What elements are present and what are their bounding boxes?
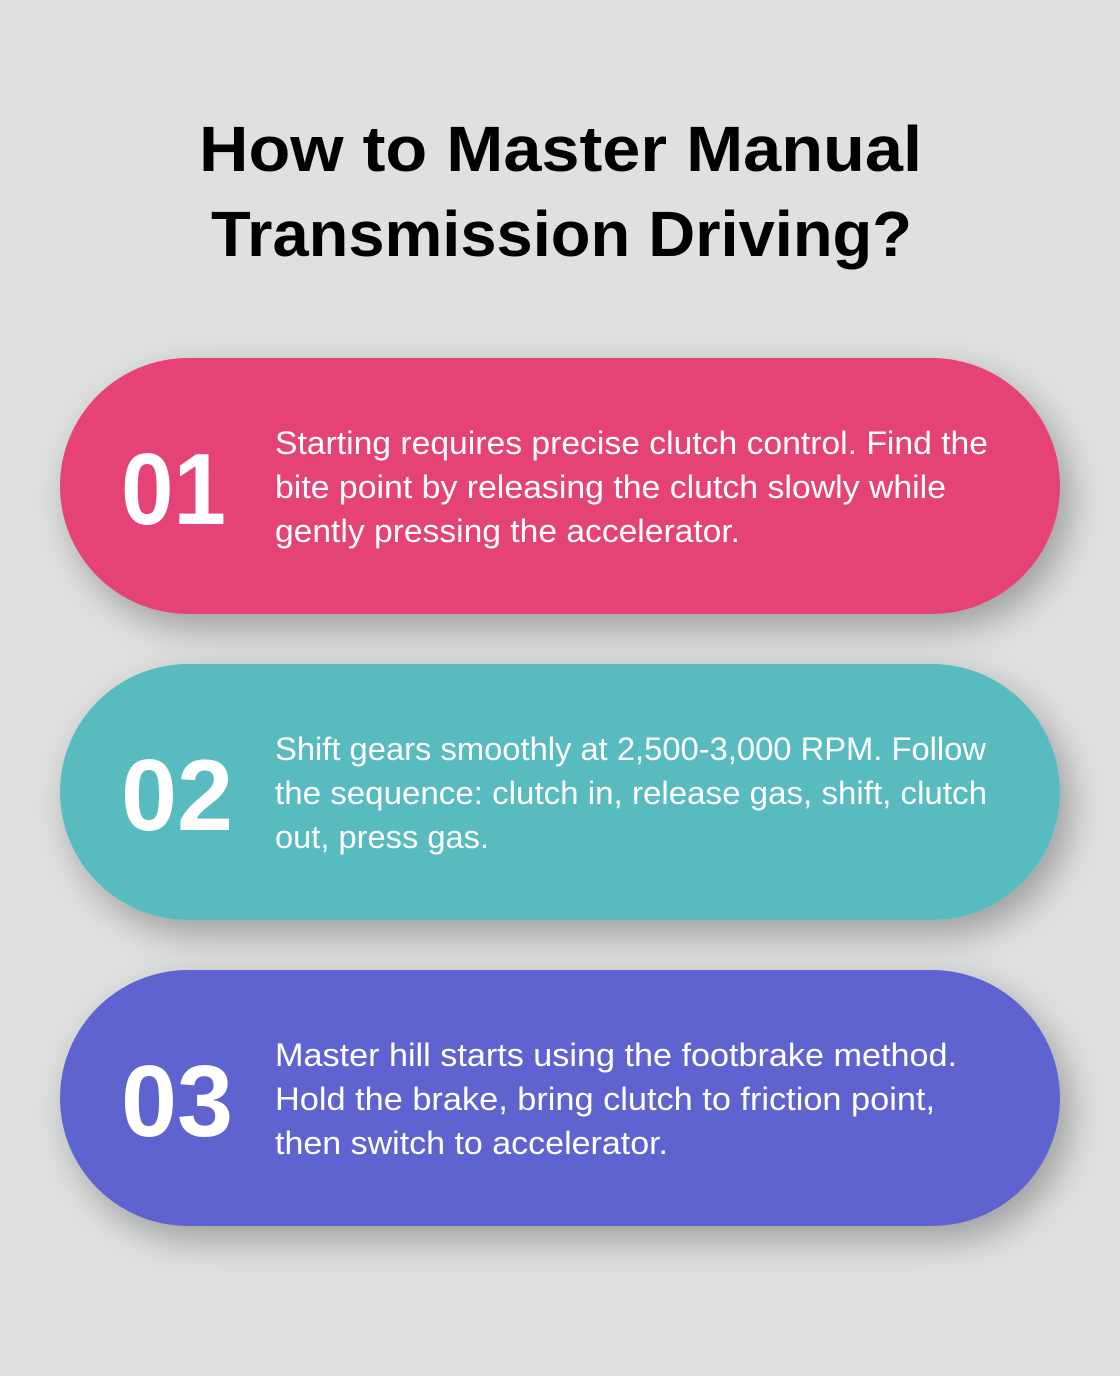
text: step 01 description <box>275 425 988 549</box>
pill: step 02 background <box>60 664 1060 920</box>
text: step 03 description: Hold the brake, bring clutch to friction point, <box>275 1081 935 1117</box>
text: step 02 description <box>275 731 987 855</box>
pill: step 01 background <box>60 358 1060 614</box>
text: step 03 description: then switch to accelerator. <box>275 1125 668 1161</box>
text: step 02 description: Shift gears smoothly at 2,500-3,000 RPM. Follow <box>275 731 987 767</box>
text: step 02 description: the sequence: clutch in, release gas, shift, clutch <box>275 775 987 811</box>
text: step 02 description: out, press gas. <box>275 819 489 855</box>
number: 02: 02 <box>121 740 233 852</box>
text: step 01 description: gently pressing the accelerator. <box>275 513 740 549</box>
text: step 01 description: Starting requires precise clutch control. Find the <box>275 425 988 461</box>
title: How to Master Manual <box>199 113 922 185</box>
panel: step 02 <box>60 664 1060 920</box>
text: step 03 description <box>275 1037 957 1161</box>
panel: step 01 <box>60 358 1060 614</box>
title: Transmission Driving? <box>211 198 912 270</box>
title <box>199 113 922 270</box>
text: step 01 description: bite point by releasing the clutch slowly while <box>275 469 946 505</box>
number: 01: 01 <box>121 434 226 546</box>
number: 03: 03 <box>121 1046 233 1158</box>
text: step 03 description: Master hill starts using the footbrake method. <box>275 1037 957 1073</box>
panel: step 03 <box>60 970 1060 1226</box>
pill: step 03 background <box>60 970 1060 1226</box>
